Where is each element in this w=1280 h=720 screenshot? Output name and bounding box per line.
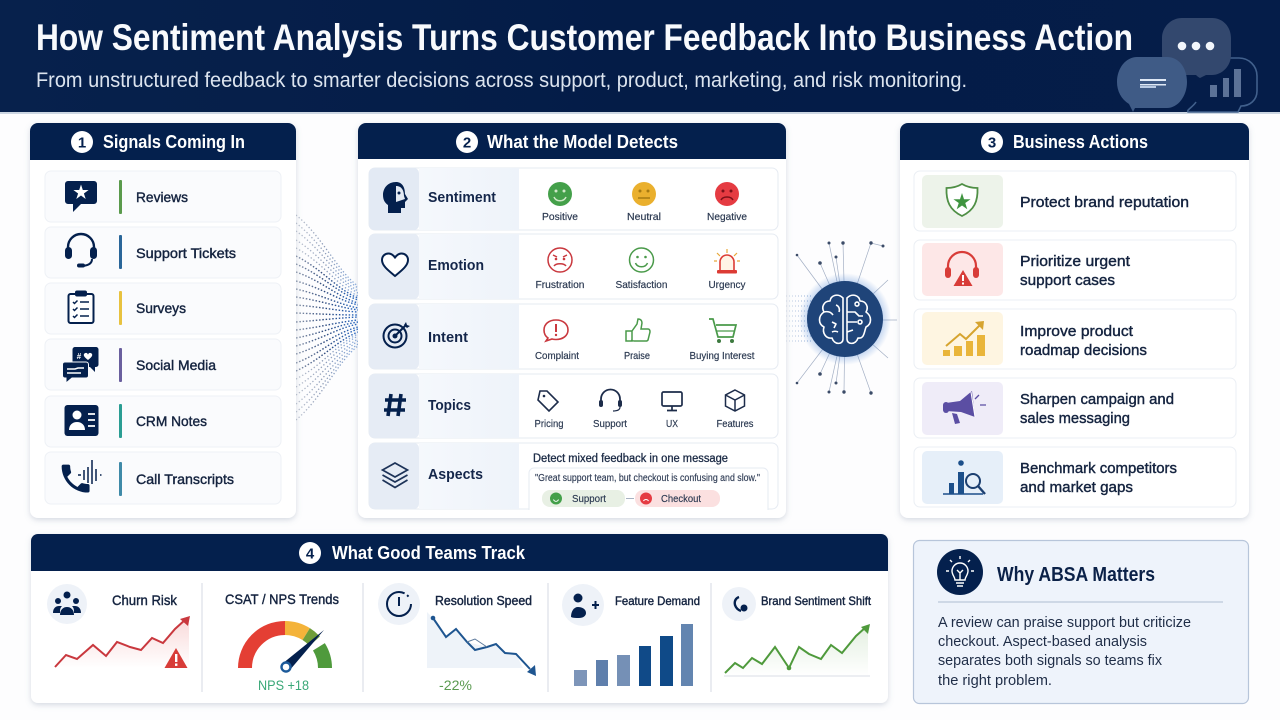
callout: example message: "Great support team, but checkout is confusing and slow." [535,473,760,484]
action: prioritize support: Prioritize urgent [1020,254,1130,270]
action: benchmark competitors [914,447,1236,507]
pill: checkout [635,490,720,507]
icon: features: Features [716,418,754,430]
heading: signals: 1 [78,134,86,152]
icon: ux [662,392,682,430]
icon: satisfaction: Satisfaction [616,279,668,291]
icon: brain [820,295,870,343]
metric: churn risk: Churn Risk [112,592,178,608]
icon: neutral [627,182,661,223]
action: benchmark competitors: and market gaps [1020,480,1133,496]
brain hub with neural connectors [786,241,897,395]
heading: model: What the Model Detects [487,132,678,152]
row: sentiment [369,168,778,230]
icon: urgency: Urgency [708,279,746,291]
icon: praise: Praise [624,350,650,362]
heading: actions: 3 [988,134,996,152]
icon: negative: Negative [707,211,747,223]
action: benchmark competitors: Benchmark competitors [1020,461,1177,477]
heading: track: What Good Teams Track [332,543,526,563]
row: social media: Social Media [136,357,216,373]
heading: signals: Signals Coming In [103,132,245,152]
row: topics: Topics [428,397,471,414]
icon: urgency [708,249,746,291]
row: surveys: Surveys [136,300,186,316]
gauge [245,628,325,668]
action: prioritize support: support cases [1020,273,1115,289]
row: crm notes [45,396,281,447]
icon: frustration [536,248,585,291]
row: topics [369,374,778,438]
metric: csat nps: NPS +18 [258,677,309,693]
metric: feature demand: Feature Demand [615,594,700,608]
panel: business actions [900,123,1249,518]
row: reviews: Reviews [136,189,188,205]
panel: what the model detects [358,123,786,518]
row: emotion: Emotion [428,257,484,274]
action: protect brand: Protect brand reputation [1020,195,1189,211]
icon: ux: UX [666,418,678,430]
pill: support: Support [572,493,606,505]
heading: model: 2 [463,134,471,152]
row: intent [369,304,778,369]
metric: brand sentiment shift [722,587,872,676]
row: call transcripts: Call Transcripts [136,471,234,487]
title: How Sentiment Analysis Turns Customer Feedback Into Business Action [36,17,1133,58]
icon: pricing: Pricing [534,418,564,430]
row: surveys [45,283,281,334]
body text: checkout. Aspect-based analysis [938,633,1147,650]
row: emotion [369,234,778,299]
callout: why ABSA matters: Why ABSA Matters [997,564,1155,586]
row: social media [45,339,281,390]
action: sharpen campaign: Sharpen campaign and [1020,392,1174,408]
row: aspects [369,443,778,510]
heading: actions: Business Actions [1013,132,1148,152]
icon: light bulb [937,549,983,595]
icon: pricing [534,391,564,430]
row: sentiment: Sentiment [428,189,496,206]
row: reviews [45,171,281,222]
action: improve product [914,309,1236,369]
metric: feature demand [562,584,700,686]
action: prioritize support [914,240,1236,300]
row: social media: # [77,352,82,361]
body text: A review can praise support but criticize [938,614,1191,631]
metric: csat nps: CSAT / NPS Trends [225,591,339,607]
icon: complaint: Complaint [535,350,579,362]
metric: brand sentiment shift: Brand Sentiment Shift [761,594,872,608]
icon: support: Support [593,418,627,430]
metric: resolution speed: Resolution Speed [435,594,532,608]
body text: separates both signals so teams fix [938,652,1162,669]
action: sharpen campaign: sales messaging [1020,411,1130,427]
metric: resolution speed [378,583,536,693]
metric: churn risk [47,584,190,668]
action: improve product: Improve product [1020,324,1133,340]
row: crm notes: CRM Notes [136,413,207,429]
icon: complaint [535,320,579,362]
icon: positive [542,182,578,223]
icon: chat bubbles [1117,18,1257,112]
subtitle: From unstructured feedback to smarter decisions across support, product, marketing, and risk monitoring. [36,69,967,92]
row: support tickets: Support Tickets [136,245,236,261]
row: intent: Intent [428,329,468,346]
row: support tickets [45,227,281,278]
pill: checkout: Checkout [661,493,701,505]
icon: support [593,390,627,430]
header banner [0,0,1280,114]
icon: praise [624,319,650,362]
metric: csat nps [225,591,339,693]
row: aspects: Detect mixed feedback in one message [533,453,728,465]
icon: buying interest [690,319,755,362]
heading: actions [981,131,1148,153]
body text: the right problem. [938,672,1052,689]
action: sharpen campaign [914,378,1236,438]
icon: features [716,390,754,430]
icon: neutral: Neutral [627,211,661,223]
panel: what good teams track [31,534,888,703]
heading: track: 4 [306,546,315,562]
icon: frustration: Frustration [536,279,585,291]
callout: example message [529,468,768,510]
action: improve product: roadmap decisions [1020,343,1147,359]
icon: satisfaction [616,248,668,291]
connector: signals flowing into model [296,215,358,420]
icon: negative [707,182,747,223]
action: protect brand [914,171,1236,231]
icon: positive: Positive [542,211,578,223]
metric: resolution speed: -22% [439,677,472,693]
panel: signals coming in [30,123,296,518]
heading: signals [71,131,245,153]
body text [938,614,1191,689]
callout: why ABSA matters [914,540,1248,704]
row: call transcripts [45,452,281,504]
row: aspects: Aspects [428,466,483,483]
pill: support [542,490,625,507]
icon: buying interest: Buying Interest [690,350,755,362]
